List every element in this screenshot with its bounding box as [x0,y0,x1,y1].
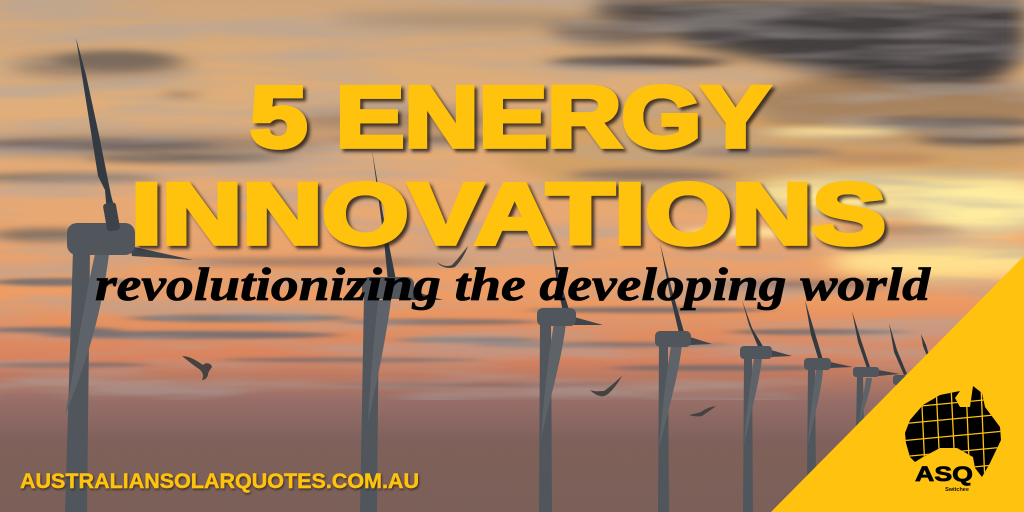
subtitle: revolutionizing the developing world [95,259,932,311]
title line 2: INNOVATIONS [131,166,886,262]
turbine 5 [740,300,792,512]
bird 1 [182,356,212,380]
website url: AUSTRALIANSOLARQUOTES.COM.AU [20,470,419,493]
icon: Australia solar panel map [905,386,1001,477]
yellow corner triangle [771,256,1024,512]
turbine 2 [360,150,443,512]
turbine 1 [65,38,193,512]
bird 2 [437,246,468,268]
wind turbines [65,38,929,512]
turbine 9 [921,334,929,356]
turbine 3 [537,245,603,512]
logo small print: Switchee [945,487,969,493]
sea [0,445,1024,512]
bird 4 [689,406,716,416]
title [131,70,886,262]
turbine 7 [852,311,900,430]
turbine 4 [655,243,712,512]
bird 3 [590,376,622,396]
turbine 8 [889,323,907,385]
birds [182,246,716,416]
logo wordmark: ASQ [915,463,973,486]
turbine 6 [804,300,853,480]
title line 1: 5 ENERGY [250,70,770,166]
logo: ASQ [905,386,1001,491]
